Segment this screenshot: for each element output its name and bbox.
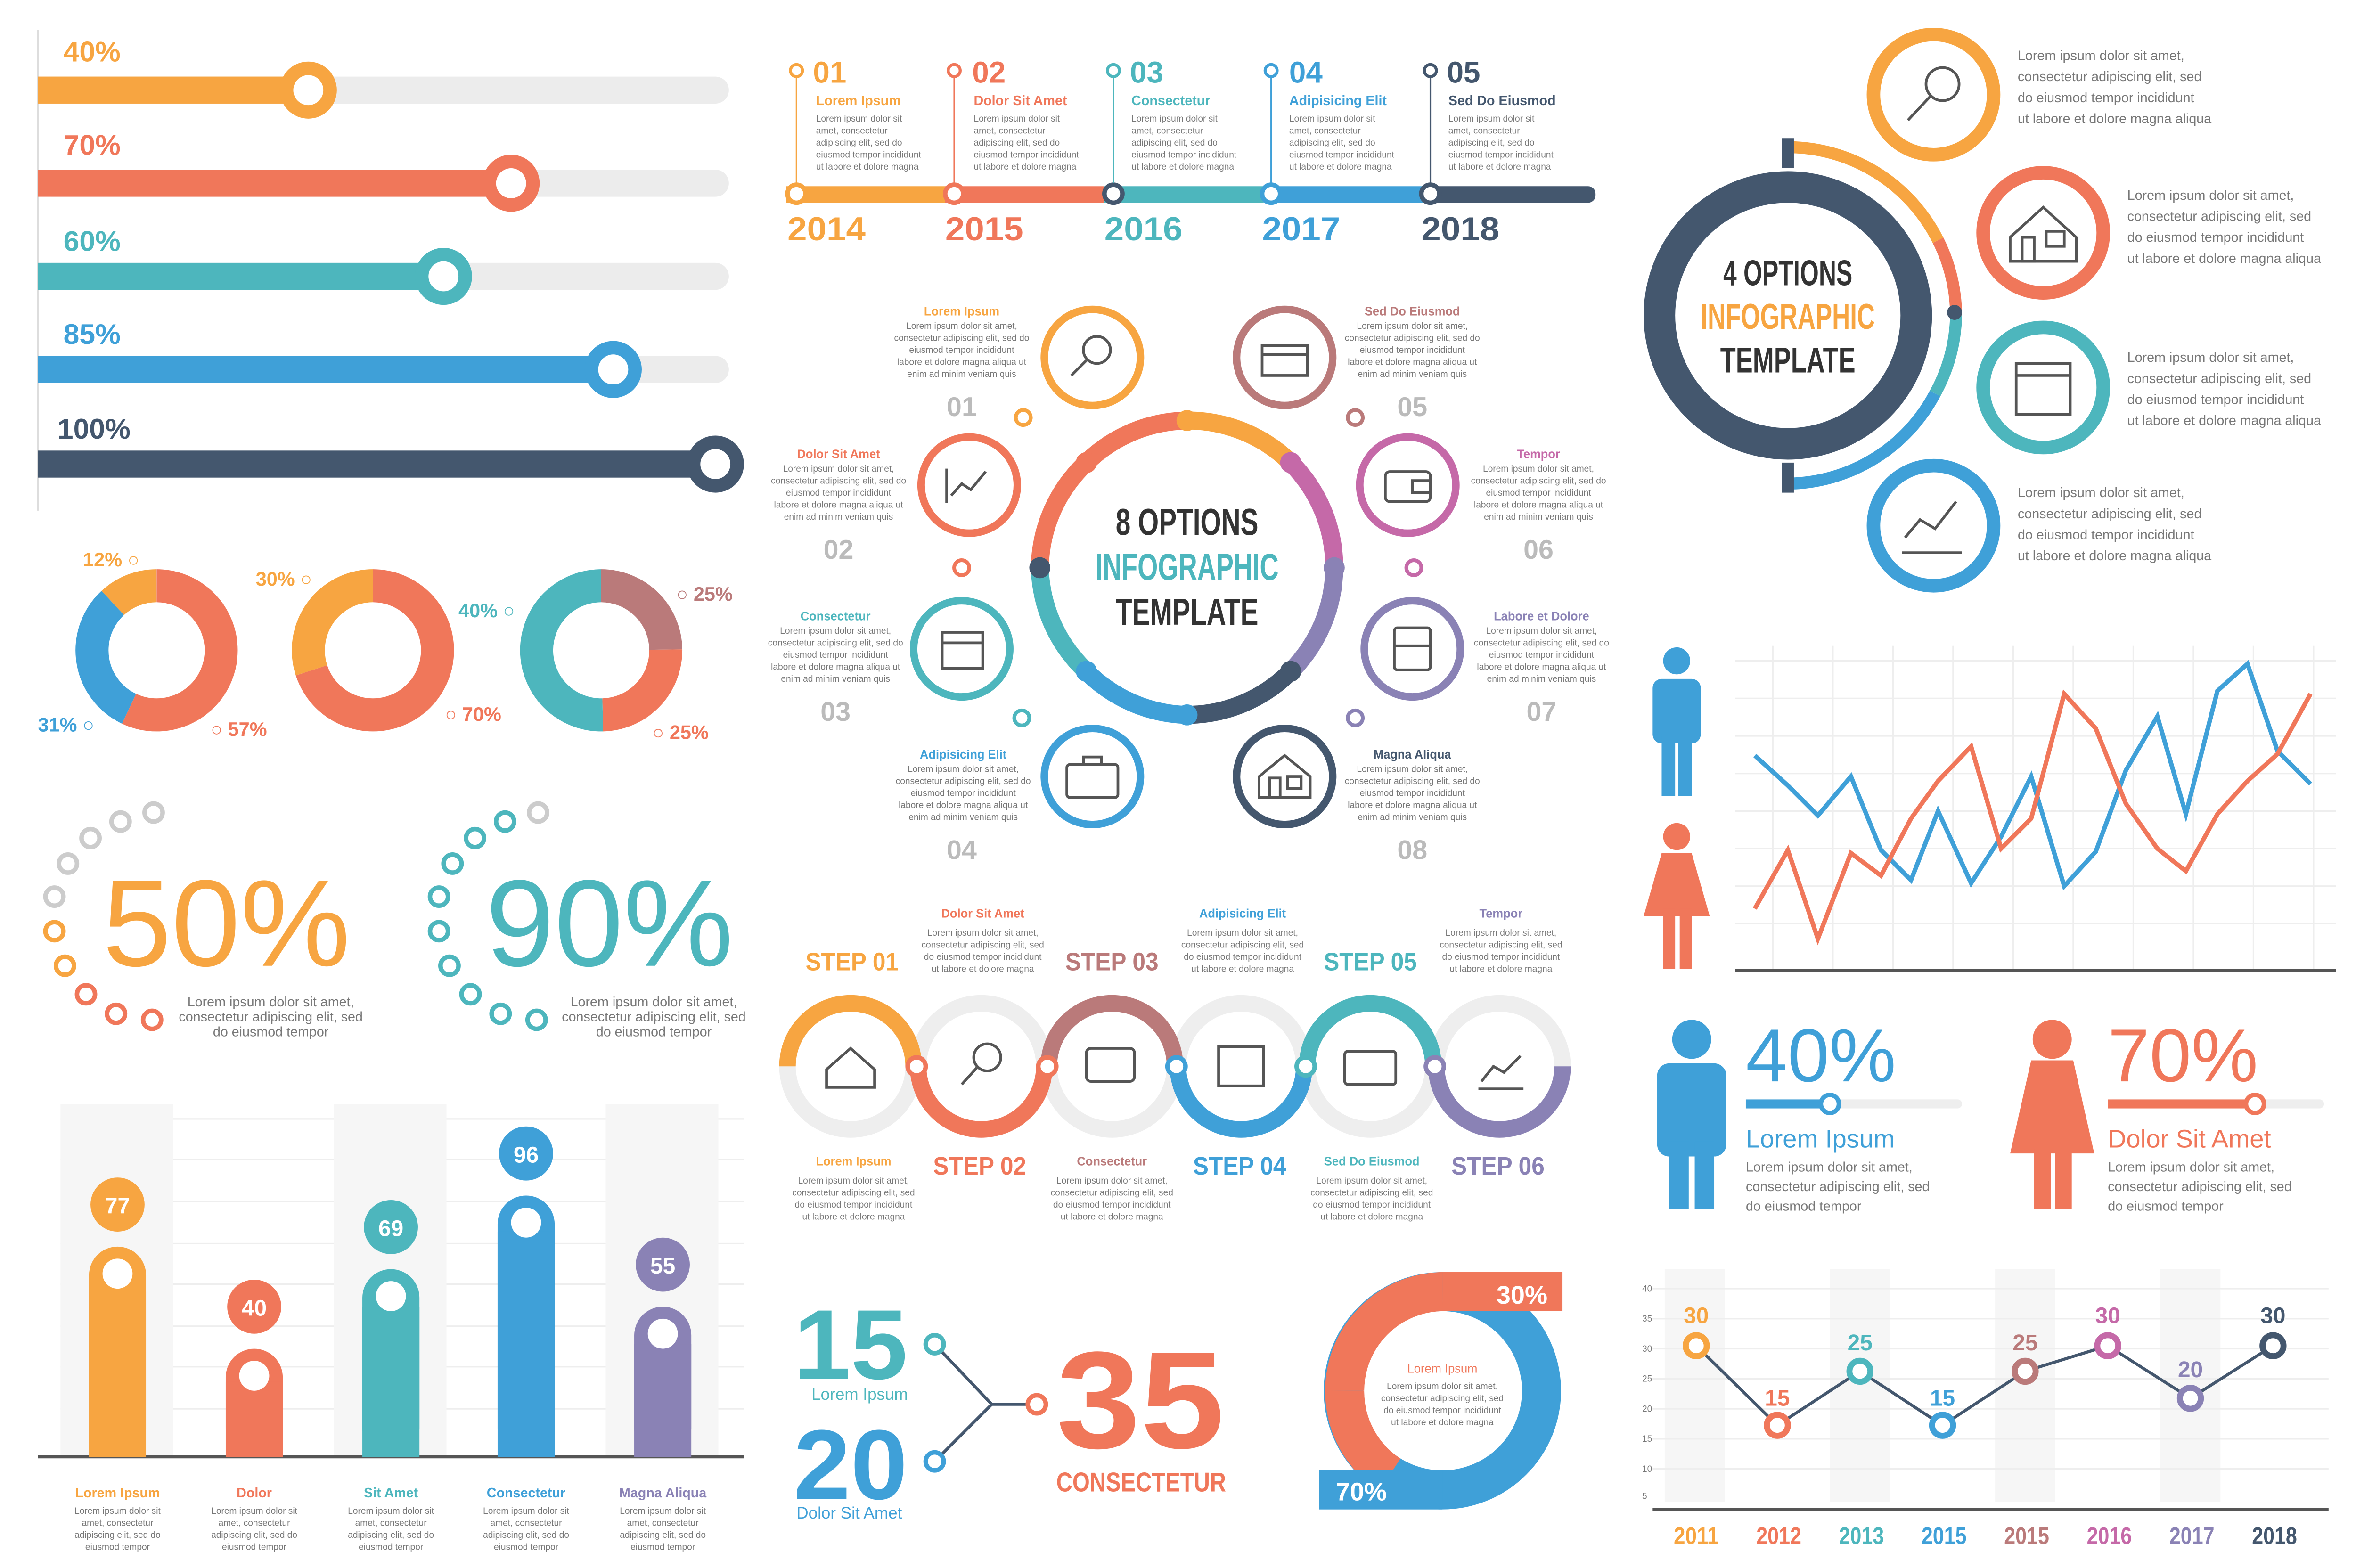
panel: 8 options: Labore et Dolore bbox=[1494, 610, 1589, 623]
panel: column chart: Consectetur bbox=[487, 1486, 565, 1501]
panel: 4 options: do eiusmod tempor incididunt bbox=[2127, 230, 2304, 245]
panel: 8 options: eiusmod tempor incididunt bbox=[783, 650, 888, 660]
panel: donut charts: ○ 25% bbox=[652, 721, 709, 743]
panel: 8 options: Lorem ipsum dolor sit amet, bbox=[1357, 321, 1468, 331]
donut 1 bbox=[92, 586, 221, 715]
panel: 4 options: INFOGRAPHIC bbox=[1701, 297, 1875, 337]
panel: 4 options: consectetur adipiscing elit, sed bbox=[2127, 209, 2311, 224]
donut 3 bbox=[537, 586, 666, 715]
panel: timeline: 05 bbox=[1447, 55, 1481, 89]
panel: timeline: eiusmod tempor incididunt bbox=[1289, 150, 1395, 160]
panel: 8 options: Tempor bbox=[1517, 448, 1560, 461]
panel: people stats: Lorem ipsum dolor sit amet, bbox=[2108, 1160, 2274, 1175]
panel: timeline: amet, consectetur bbox=[1448, 126, 1520, 136]
donut 2 bbox=[308, 586, 437, 715]
panel: 8 options: consectetur adipiscing elit, sed do bbox=[1471, 476, 1606, 486]
column 40: 40 bbox=[242, 1296, 267, 1321]
panel: steps: do eiusmod tempor incididunt bbox=[1442, 952, 1560, 962]
panel: donut charts: ○ 25% bbox=[676, 583, 733, 605]
panel: dotted percentages bbox=[45, 803, 746, 1040]
icons in 8 options bbox=[942, 336, 1431, 798]
panel: timeline: ut labore et dolore magna bbox=[973, 162, 1077, 172]
panel: steps: ut labore et dolore magna bbox=[802, 1212, 905, 1222]
panel: people stats bbox=[1657, 1013, 2324, 1214]
panel: steps: do eiusmod tempor incididunt bbox=[795, 1200, 913, 1210]
panel: steps: do eiusmod tempor incididunt bbox=[1313, 1200, 1431, 1210]
panel: column chart: Sit Amet bbox=[364, 1486, 418, 1501]
panel: yearly line chart: 25 bbox=[1848, 1331, 1873, 1356]
panel: 8 options: consectetur adipiscing elit, sed do bbox=[768, 638, 903, 648]
panel: 8 options: 06 bbox=[1523, 535, 1554, 565]
panel: column chart: amet, consectetur bbox=[627, 1519, 699, 1528]
panel: timeline: 2017 bbox=[1262, 211, 1340, 247]
panel: timeline: adipiscing elit, sed do bbox=[816, 138, 902, 148]
panel: steps bbox=[787, 907, 1562, 1222]
panel: timeline: adipiscing elit, sed do bbox=[973, 138, 1060, 148]
panel: 8 options: Lorem ipsum dolor sit amet, bbox=[1486, 626, 1597, 636]
bar 100%: 100% bbox=[57, 413, 131, 445]
panel: 4 options: Lorem ipsum dolor sit amet, bbox=[2127, 350, 2294, 365]
panel: yearly line chart: 2015 bbox=[1922, 1522, 1967, 1549]
panel: 4 options: consectetur adipiscing elit, sed bbox=[2127, 371, 2311, 386]
panel: 4 options: ut labore et dolore magna aliqua bbox=[2018, 548, 2211, 564]
panel: yearly line chart: 25 bbox=[1642, 1374, 1652, 1384]
panel: 8 options: enim ad minim veniam quis bbox=[908, 813, 1018, 823]
panel: yearly line chart: 20 bbox=[1642, 1404, 1652, 1414]
panel: dotted percentages: consectetur adipiscing elit, sed bbox=[179, 1010, 363, 1025]
panel: timeline: Lorem ipsum dolor sit bbox=[1289, 114, 1375, 124]
panel: yearly line chart: 30 bbox=[2095, 1303, 2120, 1328]
panel: people stats: do eiusmod tempor bbox=[2108, 1199, 2224, 1214]
panel: column chart: amet, consectetur bbox=[219, 1519, 290, 1528]
panel: dotted percentages: do eiusmod tempor bbox=[213, 1025, 329, 1040]
panel: steps: consectetur adipiscing elit, sed bbox=[1051, 1188, 1173, 1198]
panel: steps: Lorem ipsum dolor sit amet, bbox=[798, 1176, 909, 1186]
panel: yearly line chart bbox=[1642, 1269, 2329, 1549]
panel: 30/70 ring: 30% bbox=[1497, 1281, 1547, 1309]
panel: people stats: 40% bbox=[1746, 1013, 1896, 1097]
panel: yearly line chart: 15 bbox=[1930, 1386, 1955, 1411]
panel: gender line chart bbox=[1644, 646, 2336, 970]
panel: 8 options: labore et dolore magna aliqua ut bbox=[771, 662, 900, 672]
panel: people stats: Lorem Ipsum bbox=[1746, 1125, 1895, 1153]
column 40 bbox=[226, 1280, 283, 1457]
panel: dotted percentages: consectetur adipiscing elit, sed bbox=[562, 1010, 746, 1025]
panel: 8 options: Consectetur bbox=[801, 610, 871, 623]
panel: steps: Tempor bbox=[1480, 907, 1522, 921]
panel: 4 options: Lorem ipsum dolor sit amet, bbox=[2018, 49, 2184, 64]
panel: timeline: 03 bbox=[1130, 55, 1163, 89]
panel: yearly line chart: 20 bbox=[2178, 1357, 2203, 1382]
panel: steps: ut labore et dolore magna bbox=[932, 964, 1034, 974]
panel: yearly line chart: 25 bbox=[2012, 1331, 2037, 1356]
panel: people stats: Dolor Sit Amet bbox=[2108, 1125, 2271, 1153]
panel: 8 options: eiusmod tempor incididunt bbox=[1489, 650, 1595, 660]
panel: 30/70 ring: Lorem Ipsum bbox=[1407, 1363, 1477, 1376]
panel: timeline: 04 bbox=[1289, 55, 1323, 89]
panel: steps: STEP 04 bbox=[1193, 1152, 1286, 1180]
panel: steps: STEP 03 bbox=[1065, 947, 1159, 976]
panel: 8 options: Lorem ipsum dolor sit amet, bbox=[908, 764, 1019, 774]
panel: 8 options: eiusmod tempor incididunt bbox=[909, 345, 1014, 355]
panel: column chart: eiusmod tempor bbox=[85, 1543, 150, 1552]
panel: timeline: adipiscing elit, sed do bbox=[1448, 138, 1535, 148]
panel: steps: ut labore et dolore magna bbox=[1191, 964, 1294, 974]
panel: 8 options: Lorem ipsum dolor sit amet, bbox=[1357, 764, 1468, 774]
column 77: 77 bbox=[105, 1194, 130, 1219]
panel: column chart: adipiscing elit, sed do bbox=[348, 1530, 434, 1540]
panel: 4 options bbox=[1644, 34, 2321, 586]
panel: steps: Lorem ipsum dolor sit amet, bbox=[1056, 1176, 1168, 1186]
panel: donut charts: ○ 57% bbox=[211, 718, 267, 740]
panel: yearly line chart: 30 bbox=[1684, 1303, 1709, 1328]
panel: 8 options: labore et dolore magna aliqua ut bbox=[1477, 662, 1606, 672]
panel: 8 options: Lorem ipsum dolor sit amet, bbox=[1483, 464, 1594, 474]
panel: yearly line chart: 5 bbox=[1642, 1491, 1647, 1501]
panel: 30/70 ring: ut labore et dolore magna bbox=[1391, 1418, 1494, 1428]
panel: dotted percentages: Lorem ipsum dolor sit amet, bbox=[188, 995, 354, 1010]
panel: column chart bbox=[38, 1104, 744, 1552]
panel: yearly line chart: 10 bbox=[1642, 1464, 1652, 1474]
panel: 8 options: 02 bbox=[824, 535, 853, 565]
column 55 bbox=[634, 1238, 691, 1457]
panel: people stats: Lorem ipsum dolor sit amet, bbox=[1746, 1160, 1913, 1175]
panel: yearly line chart: 2012 bbox=[1756, 1522, 1801, 1549]
panel: 8 options: labore et dolore magna aliqua ut bbox=[1348, 800, 1477, 810]
panel: yearly line chart: 15 bbox=[1765, 1386, 1790, 1411]
icon: male bbox=[1652, 647, 1701, 796]
panel: yearly line chart: 2011 bbox=[1674, 1522, 1719, 1549]
panel: 8 options: 08 bbox=[1397, 835, 1427, 865]
panel: 8 options bbox=[768, 305, 1609, 865]
panel: yearly line chart: 2015 bbox=[2004, 1522, 2049, 1549]
panel: timeline: Lorem Ipsum bbox=[816, 93, 901, 108]
panel: 8 options: eiusmod tempor incididunt bbox=[1360, 789, 1465, 799]
panel: yearly line chart: 2016 bbox=[2087, 1522, 2132, 1549]
column 96 bbox=[498, 1127, 555, 1457]
panel: steps: Lorem ipsum dolor sit amet, bbox=[1445, 928, 1556, 938]
panel: timeline: 02 bbox=[972, 55, 1006, 89]
panel: column chart: Dolor bbox=[237, 1486, 272, 1501]
panel: 8 options: enim ad minim veniam quis bbox=[907, 369, 1016, 379]
panel: dotted percentages: Lorem ipsum dolor sit amet, bbox=[571, 995, 737, 1010]
panel: 8 options: 05 bbox=[1397, 392, 1427, 422]
panel: 8 options: enim ad minim veniam quis bbox=[1358, 369, 1467, 379]
panel: people stats: consectetur adipiscing elit, sed bbox=[1746, 1179, 1930, 1194]
bar 40%: 40% bbox=[64, 36, 121, 68]
panel: column chart: amet, consectetur bbox=[491, 1519, 562, 1528]
panel: yearly line chart: 40 bbox=[1642, 1284, 1652, 1294]
panel: yearly line chart: 2013 bbox=[1839, 1522, 1884, 1549]
panel: 8 options: TEMPLATE bbox=[1116, 591, 1259, 633]
panel: steps: Lorem ipsum dolor sit amet, bbox=[1316, 1176, 1427, 1186]
panel: timeline: 2016 bbox=[1104, 211, 1183, 247]
panel: timeline: adipiscing elit, sed do bbox=[1289, 138, 1375, 148]
panel: steps: consectetur adipiscing elit, sed bbox=[792, 1188, 915, 1198]
panel: 15 + 20 = 35: 20 bbox=[794, 1409, 908, 1520]
panel: 8 options: consectetur adipiscing elit, sed do bbox=[896, 776, 1031, 786]
panel: 8 options: eiusmod tempor incididunt bbox=[786, 488, 892, 498]
panel: steps: STEP 02 bbox=[933, 1152, 1026, 1180]
panel: 8 options: consectetur adipiscing elit, sed do bbox=[1474, 638, 1609, 648]
panel: 4 options: ut labore et dolore magna aliqua bbox=[2018, 111, 2211, 126]
panel: timeline: amet, consectetur bbox=[816, 126, 888, 136]
panel: steps: do eiusmod tempor incididunt bbox=[924, 952, 1042, 962]
panel: 15 + 20 = 35: Lorem Ipsum bbox=[811, 1385, 908, 1404]
panel: timeline: ut labore et dolore magna bbox=[816, 162, 919, 172]
panel: timeline bbox=[786, 55, 1595, 247]
bar 60% bbox=[38, 225, 729, 305]
panel: donut charts: 12% ○ bbox=[83, 548, 139, 571]
panel: 4 options: do eiusmod tempor incididunt bbox=[2018, 527, 2194, 542]
panel: column chart: Lorem ipsum dolor sit bbox=[348, 1506, 434, 1516]
panel: steps: STEP 06 bbox=[1451, 1152, 1545, 1180]
panel: timeline: Consectetur bbox=[1131, 93, 1210, 108]
panel: 30/70 ring bbox=[1319, 1272, 1562, 1510]
panel: 4 options: 4 OPTIONS bbox=[1723, 253, 1852, 294]
panel: 8 options: Lorem ipsum dolor sit amet, bbox=[783, 464, 894, 474]
panel: 8 options: consectetur adipiscing elit, sed do bbox=[1345, 334, 1480, 343]
bar 40% bbox=[38, 36, 729, 119]
panel: timeline: 2018 bbox=[1421, 211, 1499, 247]
panel: 8 options: INFOGRAPHIC bbox=[1096, 546, 1279, 588]
panel: timeline: Lorem ipsum dolor sit bbox=[816, 114, 902, 124]
panel: timeline: Sed Do Eiusmod bbox=[1448, 93, 1556, 108]
panel: 15 + 20 = 35: 15 bbox=[794, 1289, 908, 1400]
panel: timeline: amet, consectetur bbox=[973, 126, 1046, 136]
panel: 8 options: Adipisicing Elit bbox=[920, 748, 1007, 761]
panel: 4 options: do eiusmod tempor incididunt bbox=[2018, 90, 2194, 106]
panel: steps: consectetur adipiscing elit, sed bbox=[921, 940, 1044, 950]
panel: 4 options: consectetur adipiscing elit, sed bbox=[2018, 69, 2201, 84]
column 69: 69 bbox=[378, 1217, 403, 1241]
panel: column chart: eiusmod tempor bbox=[494, 1543, 559, 1552]
panel: column chart: eiusmod tempor bbox=[222, 1543, 287, 1552]
panel: 8 options: Lorem ipsum dolor sit amet, bbox=[906, 321, 1017, 331]
panel: donut charts: 40% ○ bbox=[458, 599, 515, 621]
panel: 8 options: labore et dolore magna aliqua ut bbox=[1474, 500, 1603, 510]
panel: 4 options: consectetur adipiscing elit, sed bbox=[2018, 506, 2201, 522]
panel: 4 options: ut labore et dolore magna aliqua bbox=[2127, 251, 2321, 266]
panel: yearly line chart: 2017 bbox=[2169, 1522, 2215, 1549]
panel: column chart: adipiscing elit, sed do bbox=[74, 1530, 161, 1540]
panel: timeline: ut labore et dolore magna bbox=[1289, 162, 1392, 172]
column 69 bbox=[362, 1200, 419, 1457]
panel: 4 options: ut labore et dolore magna aliqua bbox=[2127, 413, 2321, 428]
panel: 8 options: 07 bbox=[1527, 697, 1556, 727]
panel: timeline: amet, consectetur bbox=[1289, 126, 1361, 136]
bar 70% bbox=[38, 129, 729, 212]
panel: column chart: Lorem Ipsum bbox=[75, 1486, 160, 1501]
panel: yearly line chart: 2018 bbox=[2252, 1522, 2297, 1549]
panel: people stats: do eiusmod tempor bbox=[1746, 1199, 1862, 1214]
panel: 8 options: consectetur adipiscing elit, sed do bbox=[1345, 776, 1480, 786]
panel: steps: STEP 01 bbox=[805, 947, 899, 976]
panel: column chart: Lorem ipsum dolor sit bbox=[620, 1506, 706, 1516]
bar 85% bbox=[38, 318, 729, 398]
panel: timeline: Adipisicing Elit bbox=[1289, 93, 1387, 108]
panel: 8 options: Magna Aliqua bbox=[1374, 748, 1452, 761]
panel: column chart: adipiscing elit, sed do bbox=[483, 1530, 569, 1540]
panel: column chart: adipiscing elit, sed do bbox=[620, 1530, 706, 1540]
panel: column chart: Lorem ipsum dolor sit bbox=[74, 1506, 161, 1516]
panel: donut charts: 30% ○ bbox=[256, 568, 312, 590]
panel: timeline: amet, consectetur bbox=[1131, 126, 1203, 136]
bar 100% bbox=[38, 413, 744, 493]
panel: 8 options: 01 bbox=[947, 392, 977, 422]
panel: steps: Consectetur bbox=[1077, 1155, 1147, 1168]
panel: donut charts bbox=[38, 548, 733, 743]
panel: steps: consectetur adipiscing elit, sed bbox=[1440, 940, 1562, 950]
panel: yearly line chart: 30 bbox=[1642, 1344, 1652, 1354]
panel: 8 options: consectetur adipiscing elit, sed do bbox=[771, 476, 906, 486]
panel: 15 + 20 = 35: 35 bbox=[1056, 1323, 1225, 1478]
panel: 8 options: enim ad minim veniam quis bbox=[784, 512, 893, 522]
panel: steps: consectetur adipiscing elit, sed bbox=[1181, 940, 1304, 950]
panel: yearly line chart: 30 bbox=[2260, 1303, 2285, 1328]
panel: dotted percentages: do eiusmod tempor bbox=[596, 1025, 712, 1040]
panel: column chart: Lorem ipsum dolor sit bbox=[483, 1506, 570, 1516]
panel: donut charts: ○ 70% bbox=[445, 703, 501, 725]
panel: 8 options: labore et dolore magna aliqua ut bbox=[899, 800, 1028, 810]
panel: 30/70 ring: consectetur adipiscing elit, sed bbox=[1381, 1394, 1504, 1404]
panel: 15 + 20 = 35: CONSECTETUR bbox=[1056, 1467, 1226, 1497]
panel: 8 options: Lorem ipsum dolor sit amet, bbox=[780, 626, 891, 636]
panel: steps: ut labore et dolore magna bbox=[1320, 1212, 1423, 1222]
panel: 8 options: labore et dolore magna aliqua ut bbox=[774, 500, 903, 510]
panel: timeline: Lorem ipsum dolor sit bbox=[973, 114, 1060, 124]
panel: steps: Sed Do Eiusmod bbox=[1324, 1155, 1420, 1168]
panel: 30/70 ring: Lorem ipsum dolor sit amet, bbox=[1387, 1382, 1498, 1392]
column 96: 96 bbox=[514, 1143, 539, 1168]
panel: steps: Dolor Sit Amet bbox=[941, 907, 1024, 921]
bar 60%: 60% bbox=[64, 225, 121, 257]
panel: timeline: Dolor Sit Amet bbox=[973, 93, 1067, 108]
panel: timeline: 2015 bbox=[945, 211, 1023, 247]
panel: yearly line chart: 35 bbox=[1642, 1314, 1652, 1324]
panel: timeline: eiusmod tempor incididunt bbox=[973, 150, 1079, 160]
panel: 8 options: labore et dolore magna aliqua ut bbox=[897, 358, 1027, 368]
panel: 8 options: eiusmod tempor incididunt bbox=[1486, 488, 1591, 498]
panel: yearly line chart: 15 bbox=[1642, 1434, 1652, 1444]
panel: 8 options: 8 OPTIONS bbox=[1116, 501, 1259, 543]
panel: 8 options: eiusmod tempor incididunt bbox=[911, 789, 1016, 799]
panel: timeline: Lorem ipsum dolor sit bbox=[1131, 114, 1218, 124]
panel: 8 options: enim ad minim veniam quis bbox=[781, 674, 890, 684]
panel: steps: consectetur adipiscing elit, sed bbox=[1310, 1188, 1433, 1198]
panel: column chart: amet, consectetur bbox=[82, 1519, 154, 1528]
panel: steps: Lorem ipsum dolor sit amet, bbox=[927, 928, 1038, 938]
panel: dotted percentages: 90% bbox=[485, 855, 733, 992]
panel: 8 options: enim ad minim veniam quis bbox=[1358, 813, 1467, 823]
panel: donut charts: 31% ○ bbox=[38, 713, 94, 735]
panel: 15 + 20 = 35 bbox=[794, 1289, 1226, 1522]
panel: steps: Adipisicing Elit bbox=[1199, 907, 1286, 921]
panel: 8 options: enim ad minim veniam quis bbox=[1487, 674, 1596, 684]
panel: timeline: 01 bbox=[813, 55, 846, 89]
panel: column chart: Magna Aliqua bbox=[619, 1486, 707, 1501]
panel: 30/70 ring: 70% bbox=[1336, 1478, 1387, 1506]
panel: 8 options: eiusmod tempor incididunt bbox=[1360, 345, 1465, 355]
panel: 30/70 ring: do eiusmod tempor incididunt bbox=[1383, 1406, 1502, 1416]
panel: steps: do eiusmod tempor incididunt bbox=[1184, 952, 1302, 962]
panel: 8 options: 04 bbox=[947, 835, 977, 865]
panel: column chart: Lorem ipsum dolor sit bbox=[211, 1506, 298, 1516]
panel: steps: STEP 05 bbox=[1324, 947, 1417, 976]
icon: female bbox=[1644, 823, 1710, 969]
panel: 4 options: Lorem ipsum dolor sit amet, bbox=[2127, 188, 2294, 203]
panel: 4 options: TEMPLATE bbox=[1720, 341, 1856, 381]
panel: progress bars bbox=[38, 30, 744, 511]
panel: column chart: amet, consectetur bbox=[355, 1519, 427, 1528]
panel: timeline: 2014 bbox=[787, 211, 866, 247]
panel: steps: Lorem ipsum dolor sit amet, bbox=[1187, 928, 1298, 938]
panel: people stats: 70% bbox=[2108, 1013, 2258, 1097]
bar 85%: 85% bbox=[64, 318, 121, 350]
panel: 8 options: labore et dolore magna aliqua ut bbox=[1348, 358, 1477, 368]
panel: timeline: eiusmod tempor incididunt bbox=[1131, 150, 1237, 160]
panel: 4 options: Lorem ipsum dolor sit amet, bbox=[2018, 485, 2184, 500]
panel: 4 options: do eiusmod tempor incididunt bbox=[2127, 392, 2304, 408]
panel: 8 options: Dolor Sit Amet bbox=[797, 448, 880, 461]
panel: steps: ut labore et dolore magna bbox=[1061, 1212, 1163, 1222]
panel: 8 options: Sed Do Eiusmod bbox=[1365, 305, 1460, 318]
panel: timeline: ut labore et dolore magna bbox=[1448, 162, 1551, 172]
panel: column chart: eiusmod tempor bbox=[359, 1543, 424, 1552]
panel: timeline: adipiscing elit, sed do bbox=[1131, 138, 1218, 148]
panel: 8 options: 03 bbox=[820, 697, 851, 727]
column 77 bbox=[89, 1177, 146, 1457]
panel: 8 options: consectetur adipiscing elit, sed do bbox=[894, 334, 1029, 343]
panel: timeline: eiusmod tempor incididunt bbox=[816, 150, 922, 160]
column 55: 55 bbox=[650, 1254, 675, 1279]
panel: timeline: Lorem ipsum dolor sit bbox=[1448, 114, 1535, 124]
panel: 8 options: enim ad minim veniam quis bbox=[1484, 512, 1593, 522]
panel: dotted percentages: 50% bbox=[103, 855, 351, 992]
panel: 8 options: Lorem Ipsum bbox=[924, 305, 999, 318]
bar 70%: 70% bbox=[64, 129, 121, 161]
panel: steps: ut labore et dolore magna bbox=[1449, 964, 1553, 974]
panel: people stats: consectetur adipiscing elit, sed bbox=[2108, 1179, 2292, 1194]
panel: 15 + 20 = 35: Dolor Sit Amet bbox=[796, 1504, 902, 1522]
panel: steps: do eiusmod tempor incididunt bbox=[1053, 1200, 1171, 1210]
panel: timeline: eiusmod tempor incididunt bbox=[1448, 150, 1554, 160]
panel: timeline: ut labore et dolore magna bbox=[1131, 162, 1234, 172]
panel: column chart: adipiscing elit, sed do bbox=[211, 1530, 297, 1540]
panel: column chart: eiusmod tempor bbox=[630, 1543, 695, 1552]
panel: steps: Lorem Ipsum bbox=[816, 1155, 892, 1168]
